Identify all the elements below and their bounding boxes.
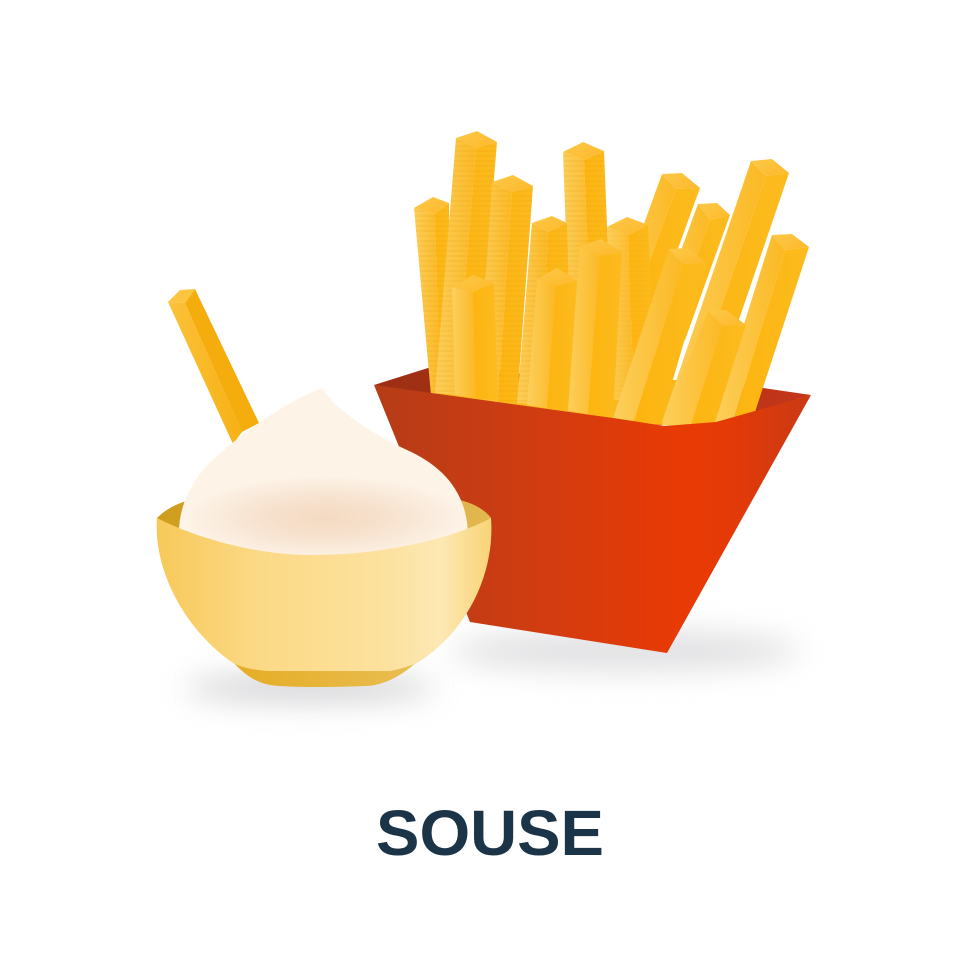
fry: lower filler xyxy=(434,380,722,426)
fries carton: front face xyxy=(374,385,811,653)
fry: short center xyxy=(517,216,572,405)
fry: long right xyxy=(662,159,789,422)
title: SOUSE xyxy=(376,797,604,869)
bowl: body xyxy=(157,518,491,671)
fry: front left xyxy=(452,275,498,401)
fry: second tall xyxy=(478,175,533,403)
bowl: inner back wall xyxy=(157,500,491,560)
fry: back center right xyxy=(607,217,656,400)
sauce: mayonnaise mound xyxy=(179,388,468,562)
fry: back center xyxy=(563,142,614,400)
fry: tall left xyxy=(435,131,497,396)
bowl: foot xyxy=(233,662,417,687)
fries carton: back panel xyxy=(374,368,811,425)
shadow: box xyxy=(450,631,800,671)
shadow: bowl xyxy=(185,675,435,701)
fry: back right slanted xyxy=(609,173,700,320)
fry: small back right xyxy=(648,203,730,340)
fry: front center xyxy=(568,239,622,418)
fries group xyxy=(414,131,809,428)
dipping stick xyxy=(168,289,259,444)
fry: far right xyxy=(713,234,809,423)
fry: front right short xyxy=(662,310,746,428)
fry: front center left xyxy=(527,268,577,411)
fry: front slanted xyxy=(613,248,707,424)
fry: far left xyxy=(414,197,450,395)
bowl with sauce xyxy=(157,388,491,687)
